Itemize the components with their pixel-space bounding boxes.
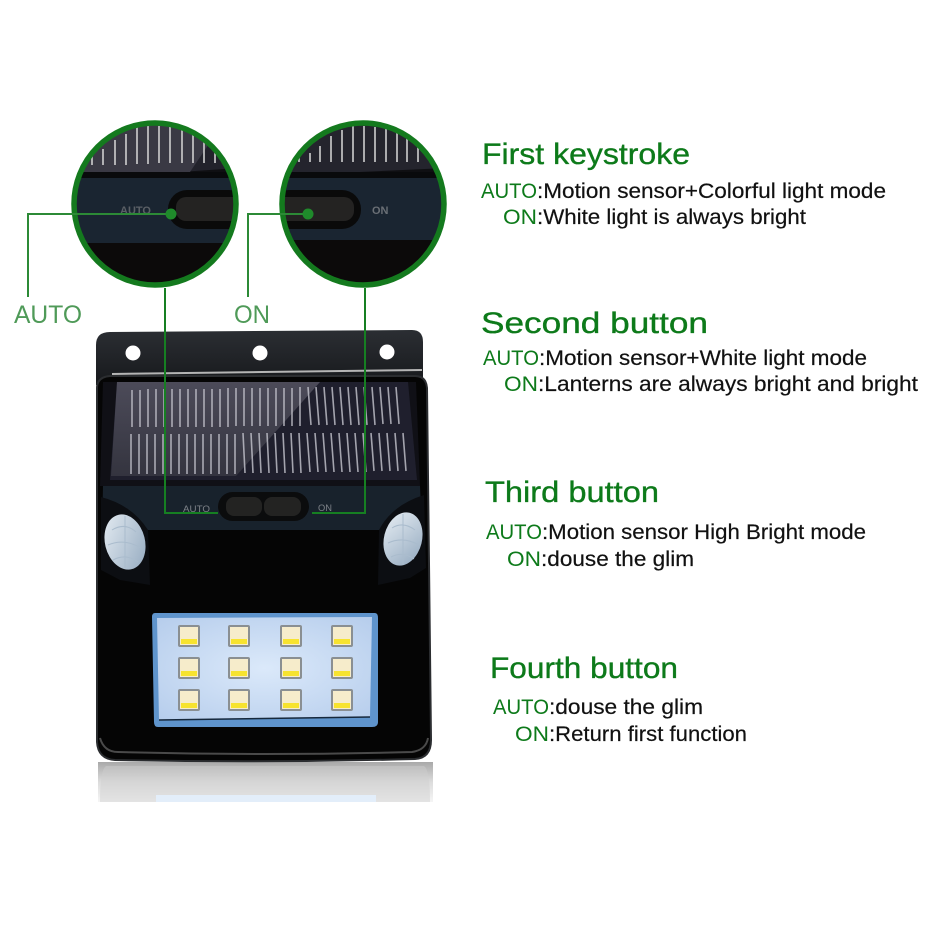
- button strip: [102, 486, 422, 530]
- text block: third button: :Motion sensor High Bright mode: [542, 521, 866, 544]
- text block: fourth button: :douse the glim: [549, 696, 703, 719]
- connector: left circle to button: [165, 288, 218, 513]
- leader line: AUTO: [28, 208, 176, 297]
- text block: third button: AUTO: [486, 521, 542, 544]
- device body: [97, 376, 431, 761]
- text block: first keystroke: [481, 138, 886, 229]
- device: solar wall light: ON: [318, 503, 332, 513]
- zoom circle: ON switch: ON: [372, 205, 389, 217]
- icon: product reflection: [98, 762, 433, 802]
- left motion sensor: [99, 497, 151, 585]
- heading: Third button: [485, 476, 659, 509]
- leader line: ON: [248, 208, 314, 297]
- text block: fourth button: AUTO: [493, 696, 549, 719]
- text block: second button: :Motion sensor+White light mode: [539, 347, 867, 370]
- text block: second button: [481, 307, 918, 396]
- text block: first keystroke: ON: [503, 206, 537, 229]
- text block: first keystroke: AUTO: [481, 180, 537, 203]
- heading: Second button: [481, 307, 708, 340]
- LED panel: [152, 613, 378, 727]
- heading: Fourth button: [490, 652, 678, 685]
- zoom circle: AUTO switch: AUTO: [120, 205, 151, 217]
- text block: third button: [485, 476, 866, 571]
- text block: second button: ON: [504, 373, 538, 396]
- text block: third button: ON: [507, 548, 541, 571]
- device: solar wall light: [96, 330, 431, 761]
- text block: first keystroke: :White light is always bright: [537, 206, 806, 229]
- solar panel: [100, 382, 420, 486]
- text block: fourth button: ON: [515, 723, 549, 746]
- text block: second button: AUTO: [483, 347, 539, 370]
- connector: right circle to button: [312, 288, 365, 513]
- text block: fourth button: [490, 652, 747, 746]
- zoom circle: ON switch: [270, 120, 448, 290]
- text block: first keystroke: :Motion sensor+Colorful light mode: [537, 180, 886, 203]
- heading: First keystroke: [482, 138, 690, 171]
- top mounting plate: [96, 330, 423, 385]
- label: AUTO: AUTO: [14, 301, 82, 329]
- device: solar wall light: AUTO: [183, 504, 210, 514]
- right motion sensor: [378, 495, 428, 585]
- button: [218, 492, 309, 521]
- text block: fourth button: :Return first function: [549, 723, 747, 746]
- label: ON: ON: [234, 301, 270, 329]
- text block: third button: :douse the glim: [541, 548, 694, 571]
- zoom circle: AUTO switch: [70, 120, 248, 293]
- text block: second button: :Lanterns are always bright and bright: [538, 373, 918, 396]
